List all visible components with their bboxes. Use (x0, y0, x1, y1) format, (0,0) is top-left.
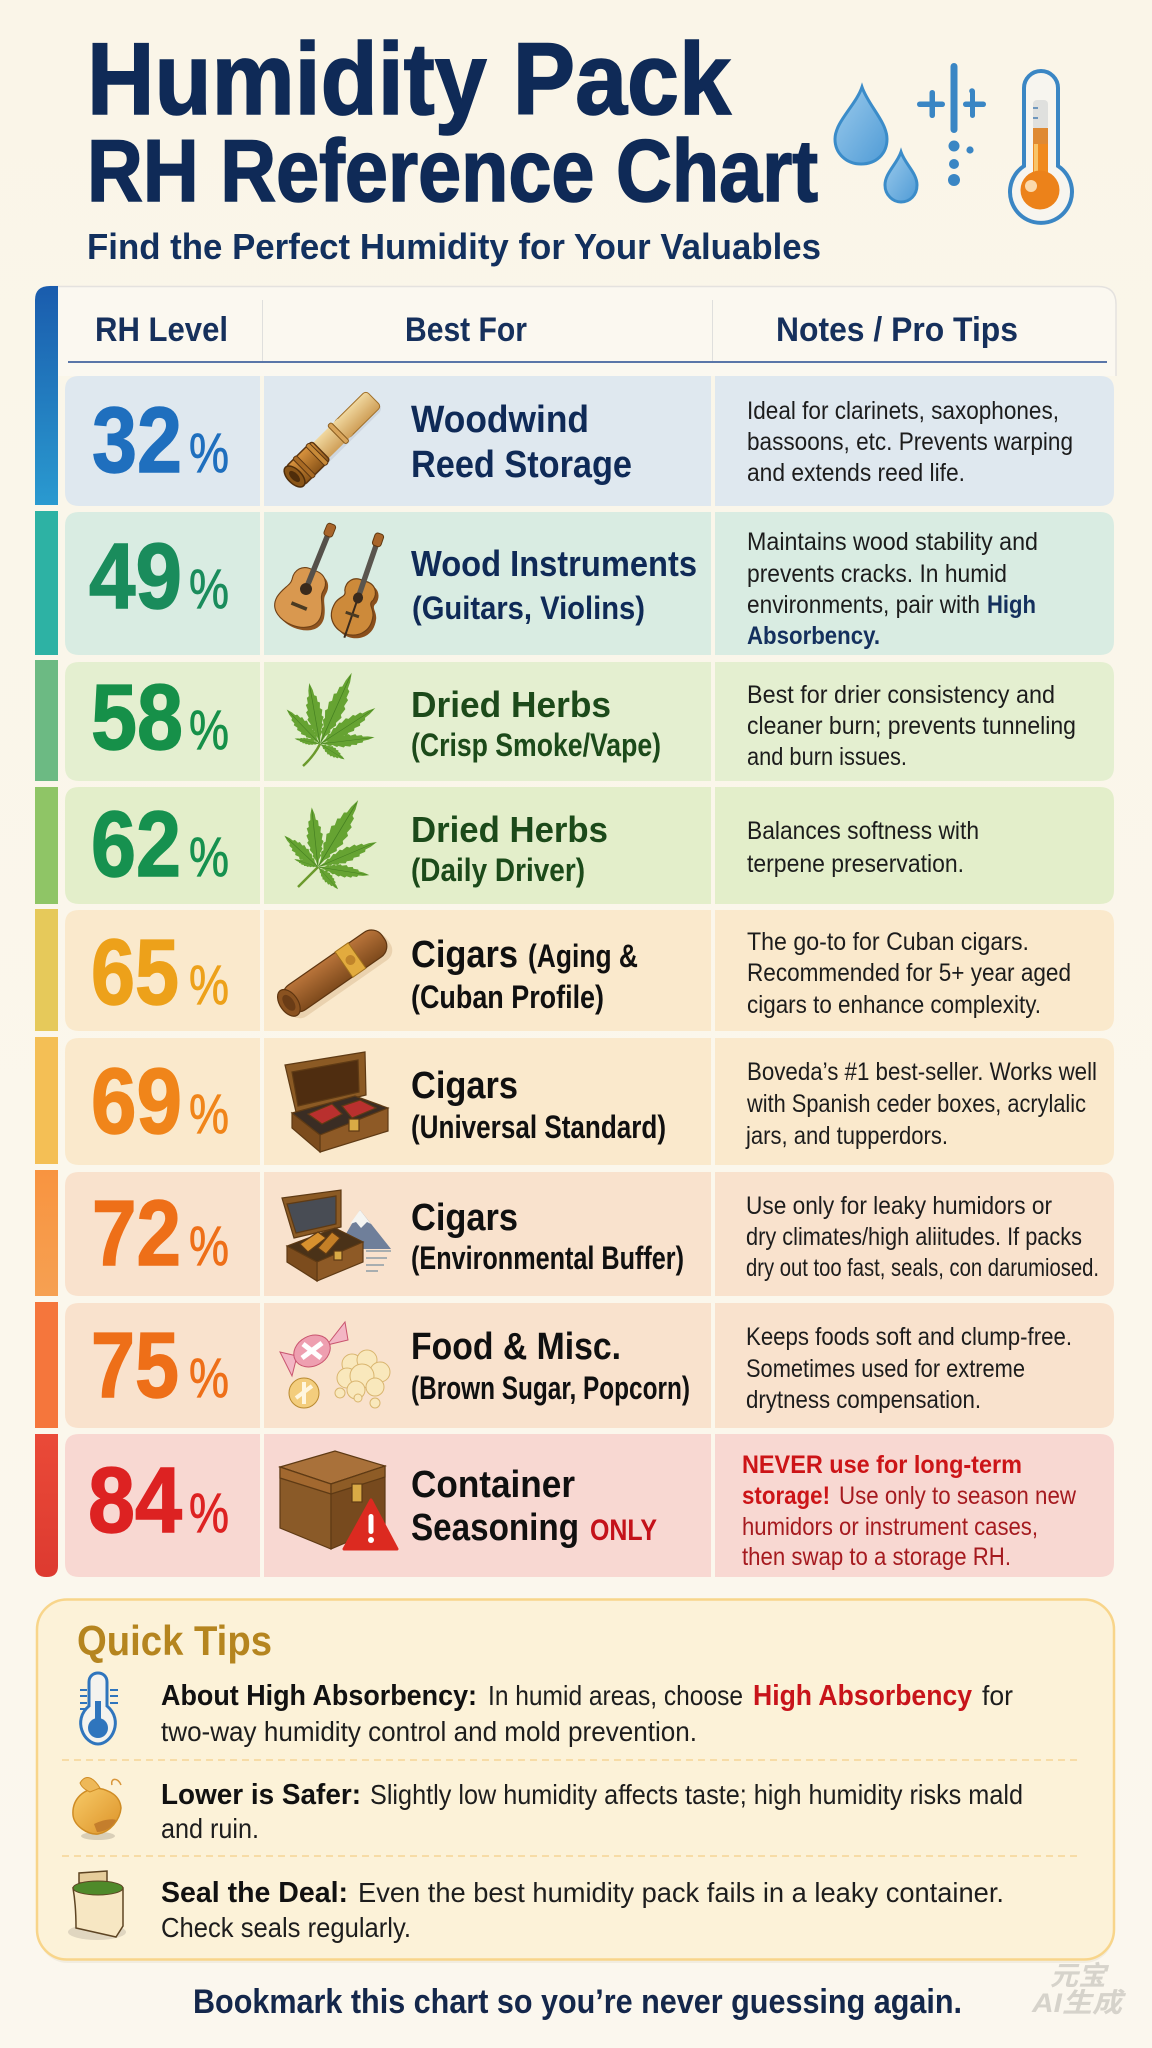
notes (747, 528, 1038, 650)
tip 2 text: Slightly low humidity affects taste; high humidity risks mald (370, 1779, 1023, 1810)
row: 84% (35, 1434, 1114, 1577)
panel cells (65, 1172, 1114, 1296)
label: (Daily Driver) (411, 852, 585, 888)
label: (Aging & (528, 938, 638, 974)
tip 1 text: for (982, 1680, 1013, 1711)
header: Best For: Best For (405, 311, 527, 349)
heading: Quick Tips (77, 1617, 272, 1664)
icon: candy and popcorn (280, 1322, 390, 1408)
title (87, 22, 818, 220)
label: (Environmental Buffer) (411, 1240, 684, 1276)
label (411, 1197, 684, 1276)
label: Cigars (411, 934, 518, 976)
rh value: % (189, 421, 229, 484)
notes: High (987, 591, 1036, 619)
notes: dry climates/high aliitudes. If packs (746, 1223, 1082, 1251)
notes: Use only to season new (839, 1482, 1077, 1510)
notes: Balances softness with (747, 817, 979, 845)
label: Food & Misc. (411, 1326, 621, 1368)
icon: woodwind reed (280, 389, 383, 491)
notes: Sometimes used for extreme (746, 1355, 1025, 1383)
watermark: 元宝 (1050, 1961, 1109, 1991)
notes: terpene preservation. (747, 850, 964, 878)
guitar (269, 515, 358, 637)
icon: humidor and mountain (282, 1190, 391, 1281)
label: Cigars (411, 1197, 518, 1239)
footer message: Bookmark this chart so you’re never guessing again. (193, 1983, 962, 2021)
notes: cleaner burn; prevents tunneling (747, 712, 1076, 740)
divider (62, 1759, 1077, 1761)
panel cells (65, 1303, 1114, 1428)
rh value: 49 (89, 524, 182, 628)
rh value: 65 (91, 920, 179, 1024)
subtitle: Find the Perfect Humidity for Your Valuables (87, 226, 821, 267)
violin (325, 527, 403, 646)
notes: Keeps foods soft and clump-free. (746, 1323, 1072, 1351)
tip 3 text: Seal the Deal: (161, 1877, 348, 1909)
panel cells (65, 1434, 1114, 1577)
label: (Universal Standard) (411, 1109, 666, 1145)
tip 1 text (161, 1680, 1013, 1747)
rh value: 72 (92, 1181, 181, 1285)
icon: plus and dots (917, 63, 986, 186)
title: RH Reference Chart (87, 121, 818, 220)
rh value: 75 (91, 1313, 179, 1417)
label: Container (411, 1464, 575, 1506)
color strip (35, 787, 58, 904)
row: 69% (35, 1037, 1114, 1165)
notes: Maintains wood stability and (747, 528, 1038, 556)
notes: then swap to a storage RH. (742, 1543, 1011, 1571)
row: 32% (35, 286, 1114, 506)
yellow candy (289, 1378, 319, 1408)
notes: Use only for leaky humidors or (746, 1192, 1052, 1220)
notes (746, 1192, 1099, 1282)
notes: and burn issues. (747, 743, 907, 771)
tip 1 text: two-way humidity control and mold prevention. (161, 1716, 697, 1747)
rh value: % (189, 1214, 229, 1277)
label: Cigars (411, 1065, 518, 1107)
panel cells (65, 1038, 1114, 1165)
row: 72% (35, 1170, 1114, 1296)
label (411, 684, 661, 763)
notes: NEVER use for long-term (742, 1451, 1022, 1479)
notes: storage! (742, 1482, 830, 1510)
panel background (37, 1600, 1114, 1963)
label: ONLY (590, 1514, 657, 1547)
notes (745, 1058, 1097, 1150)
notes (742, 1451, 1077, 1571)
color strip (35, 1434, 58, 1577)
icon: thermometer (1010, 71, 1072, 223)
header rule (68, 361, 1107, 363)
icon: crate with warning (280, 1451, 397, 1549)
notes: prevents cracks. In humid (747, 560, 1007, 588)
rh value: % (189, 1481, 229, 1544)
panel cells (65, 512, 1114, 655)
notes: environments, pair with (747, 591, 980, 619)
notes: bassoons, etc. Prevents warping (747, 428, 1073, 456)
label: Dried Herbs (411, 684, 611, 725)
notes (747, 817, 979, 878)
notes: humidors or instrument cases, (742, 1513, 1038, 1541)
icon: cigar (273, 923, 397, 1025)
header: RH Level: RH Level (95, 311, 228, 349)
popcorn (335, 1350, 390, 1408)
icon: herb leaf (282, 669, 379, 766)
panel cells (65, 910, 1114, 1031)
label (411, 934, 638, 1015)
tip 2 text (161, 1779, 1023, 1844)
notes (746, 1323, 1072, 1414)
panel cells (65, 376, 1114, 506)
label (411, 1065, 666, 1145)
rh value: 62 (91, 792, 181, 896)
panel cells (65, 662, 1114, 781)
color strip (35, 1037, 58, 1164)
notes: Absorbency. (747, 622, 880, 650)
color strip (35, 511, 58, 655)
icon: small water drop (885, 152, 917, 202)
watermark: AI生成 (1031, 1988, 1126, 2018)
rh value: 84 (88, 1448, 182, 1552)
label (411, 1464, 657, 1549)
icon: open humidor (285, 1052, 388, 1152)
mountain (337, 1210, 391, 1249)
tip 2 text: and ruin. (161, 1813, 259, 1844)
rh value: % (189, 825, 229, 888)
tip 1 text: About High Absorbency: (161, 1680, 477, 1712)
icon: humidity drops, plus signs and thermometer (835, 63, 1072, 223)
rh value: 32 (92, 388, 182, 492)
label: (Guitars, Violins) (412, 590, 645, 626)
panel: quick tips (37, 1600, 1114, 1963)
tip 1 text: High Absorbency (753, 1680, 972, 1712)
row: 75% (35, 1302, 1114, 1428)
panel: table header background (50, 286, 1116, 376)
row: 49% (35, 511, 1114, 655)
header: Notes / Pro Tips: Notes / Pro Tips (776, 311, 1018, 349)
label: Reed Storage (411, 444, 632, 486)
icon: golden pot (73, 1778, 121, 1840)
label (411, 543, 697, 626)
color strip (35, 1302, 58, 1428)
rh value: 58 (91, 665, 183, 769)
label: Woodwind (411, 399, 589, 441)
watermark (1031, 1961, 1126, 2018)
rh value: 69 (91, 1049, 182, 1153)
color strip (35, 1170, 58, 1296)
color strip (35, 909, 58, 1031)
label: (Crisp Smoke/Vape) (411, 727, 661, 763)
label (411, 1326, 690, 1406)
icon: herb leaf (280, 795, 380, 893)
notes: Boveda’s #1 best-seller. Works well (747, 1058, 1097, 1086)
color strip (35, 660, 58, 781)
notes: with Spanish ceder boxes, acrylalic (746, 1090, 1086, 1118)
label (411, 809, 608, 888)
label (411, 399, 632, 486)
color strip (35, 286, 58, 505)
notes: Ideal for clarinets, saxophones, (747, 397, 1059, 425)
label: Wood Instruments (411, 543, 697, 584)
notes: Recommended for 5+ year aged (747, 959, 1071, 987)
label: (Brown Sugar, Popcorn) (411, 1370, 690, 1406)
notes: drytness compensation. (746, 1386, 981, 1414)
icon: sealed bag (68, 1871, 126, 1940)
notes (747, 681, 1076, 771)
rh value: % (189, 698, 229, 761)
notes: jars, and tupperdors. (745, 1122, 948, 1150)
table header (50, 286, 1116, 376)
notes (747, 397, 1073, 487)
tip 3 text (161, 1877, 1004, 1943)
rh value: % (189, 557, 229, 620)
tip 1 text: In humid areas, choose (488, 1680, 743, 1711)
notes: Best for drier consistency and (747, 681, 1055, 709)
rh value: % (189, 1082, 229, 1145)
label: Seasoning (411, 1507, 579, 1549)
notes: The go-to for Cuban cigars. (747, 928, 1029, 956)
rh value: % (189, 953, 229, 1016)
tip 3 text: Check seals regularly. (161, 1912, 411, 1943)
title: Humidity Pack (87, 22, 731, 136)
notes: cigars to enhance complexity. (747, 991, 1041, 1019)
divider (62, 1855, 1077, 1857)
label: (Cuban Profile) (411, 979, 604, 1015)
row: 62% (35, 787, 1114, 904)
rh value: % (189, 1346, 229, 1409)
icon: guitar and violin (269, 515, 403, 646)
label: Dried Herbs (411, 809, 608, 850)
icon: blue thermometer (80, 1673, 118, 1744)
notes (747, 928, 1071, 1019)
panel cells (65, 787, 1114, 904)
notes: and extends reed life. (747, 459, 965, 487)
tip 3 text: Even the best humidity pack fails in a leaky container. (358, 1877, 1004, 1908)
pink candy (327, 1322, 348, 1345)
row: 58% (35, 660, 1114, 781)
tip 2 text: Lower is Safer: (161, 1779, 361, 1811)
icon: warning triangle (344, 1500, 397, 1549)
icon: large water drop (835, 87, 887, 164)
row: 65% (35, 909, 1114, 1031)
